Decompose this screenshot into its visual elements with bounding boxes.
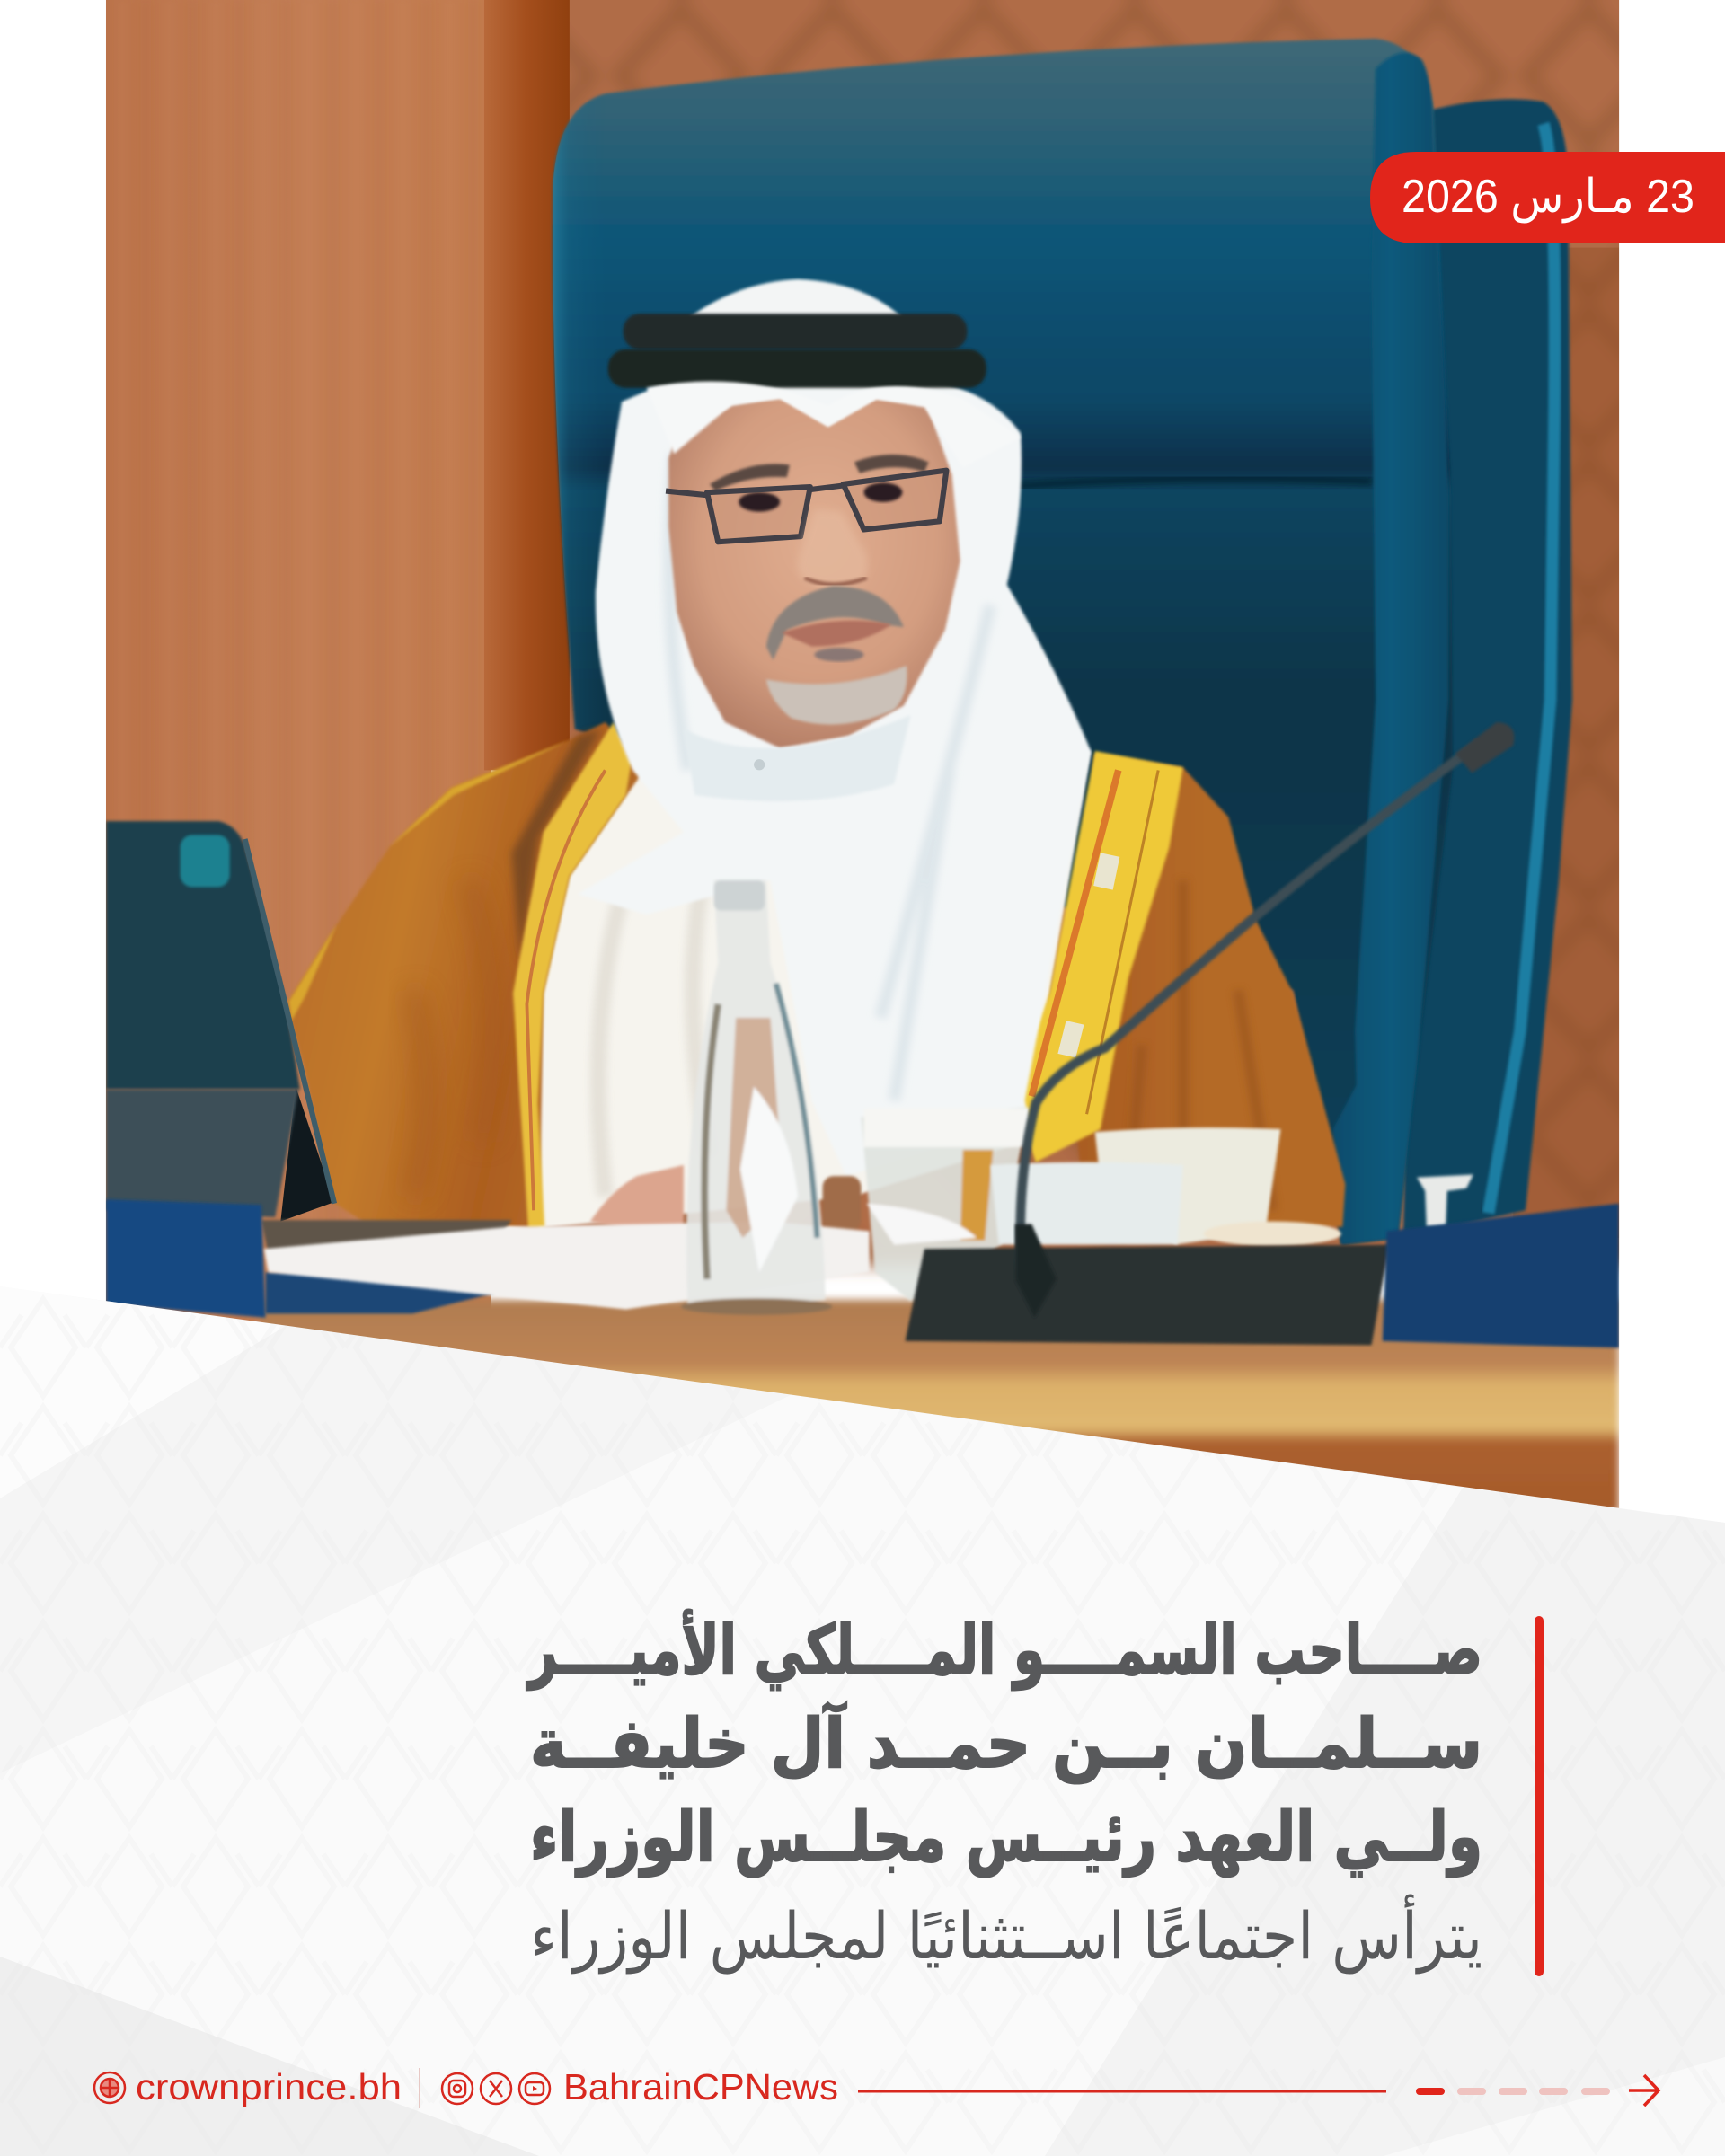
robe right — [1073, 754, 1345, 1227]
panel pattern — [0, 1286, 1725, 2156]
eye right — [864, 482, 902, 502]
agal lower — [608, 349, 986, 388]
collar button — [754, 759, 765, 770]
icon: globe — [94, 2072, 125, 2103]
panel facet: right dark — [1045, 1488, 1725, 2156]
patterned wall right — [523, 0, 1650, 1266]
lips — [782, 621, 891, 647]
tablet gap — [280, 1087, 334, 1222]
blue box right — [1383, 1204, 1619, 1348]
progress dashes — [1416, 2088, 1610, 2095]
ghutra forehead band — [647, 381, 1021, 468]
tablet — [106, 821, 300, 1090]
footer line — [858, 2090, 1386, 2093]
badge shape — [1370, 152, 1725, 243]
agal upper — [624, 314, 967, 349]
robe inner shadow — [512, 729, 601, 963]
chair left sheen — [553, 69, 826, 743]
small dispenser — [1417, 1175, 1473, 1227]
icon: instagram — [442, 2073, 473, 2104]
microphone arm — [1021, 743, 1480, 1279]
eyebrow right — [854, 455, 928, 473]
thobe folds — [598, 826, 715, 1197]
icon: youtube — [519, 2073, 550, 2104]
headline block — [526, 1609, 1482, 1975]
drinking glass — [861, 1108, 1029, 1301]
thobe white — [539, 709, 1091, 1228]
moustache — [766, 586, 904, 660]
panel facet: upper grey band — [0, 1326, 791, 1773]
bottle — [681, 880, 832, 1315]
nostril shadow — [805, 578, 867, 585]
gold trim left — [513, 722, 632, 1228]
chair side wing — [1403, 99, 1572, 1238]
lens tint left — [707, 487, 810, 542]
chair wing highlight stripe — [1489, 124, 1555, 1213]
wood wall left — [106, 0, 491, 1375]
ghutra drape — [578, 383, 1091, 1176]
gold trim light marks — [1057, 853, 1119, 1057]
robe left yellow edge — [289, 740, 570, 1021]
robe right folds — [1128, 880, 1272, 1210]
gold trim right — [1013, 751, 1183, 1162]
headline line 4: يترأس اجتماعًا اســتثنائيًا لمجلس الوزراء — [530, 1894, 1482, 1975]
panel facet: bottom-right light — [1384, 2057, 1725, 2156]
panel facet: top-left light — [0, 1286, 286, 1498]
gold trim right stitching — [1031, 770, 1119, 1096]
footer divider — [419, 2068, 420, 2108]
photo: official at cabinet meeting — [106, 0, 1650, 1513]
hand — [590, 1165, 684, 1233]
eye left — [739, 492, 780, 512]
tablet edge — [245, 839, 334, 1204]
mug back — [1095, 1127, 1280, 1245]
background panel — [0, 1286, 1725, 2156]
dark wood column — [484, 0, 570, 770]
neck collar — [684, 715, 911, 801]
cap top — [685, 279, 905, 321]
nose — [798, 509, 868, 587]
gold trim left stitching — [526, 770, 606, 1210]
microphone base — [905, 1245, 1389, 1345]
tablet camera — [181, 835, 230, 888]
face — [668, 397, 960, 748]
notebook — [261, 1220, 512, 1254]
lens tint right — [844, 471, 946, 529]
tablet lower — [106, 1090, 298, 1217]
blue box left — [106, 1199, 266, 1318]
handle text: BahrainCPNews — [563, 2066, 838, 2107]
table — [261, 1300, 1619, 1513]
footer — [94, 2066, 1659, 2108]
soul patch — [814, 648, 864, 661]
website text: crownprince.bh — [136, 2066, 402, 2107]
panel facet: bottom-left dark — [0, 1957, 539, 2156]
microphone head — [1455, 722, 1514, 773]
headline line 2: ســلمــان بــن حمــد آل خليفــة — [530, 1701, 1482, 1784]
panel base — [0, 1286, 1725, 2156]
chair side roll — [1333, 53, 1448, 1245]
dark blue folder — [266, 1272, 495, 1313]
eyebrow left — [710, 464, 790, 491]
hand right — [823, 1176, 861, 1231]
robe left folds — [412, 880, 492, 1197]
saucer — [1204, 1222, 1341, 1246]
panel facet: centre light — [0, 1395, 1463, 2156]
icon: X — [481, 2073, 511, 2104]
red vertical bar — [1535, 1616, 1544, 1976]
glasses — [666, 471, 946, 542]
microphone foot — [1015, 1224, 1057, 1318]
papers — [264, 1222, 870, 1310]
headline line 3: ولــي العهد رئيــس مجلــس الوزراء — [530, 1797, 1482, 1878]
robe left — [289, 722, 647, 1228]
chair seam — [1011, 478, 1373, 487]
goatee — [766, 666, 907, 725]
wall right darkening — [1513, 248, 1619, 1238]
date text: 23 مـارس 2026 — [1402, 171, 1694, 224]
date badge — [1370, 152, 1725, 243]
arrow — [1629, 2075, 1659, 2106]
chair back — [553, 39, 1453, 1245]
ghutra shading — [669, 454, 990, 1100]
cup front — [990, 1162, 1183, 1245]
